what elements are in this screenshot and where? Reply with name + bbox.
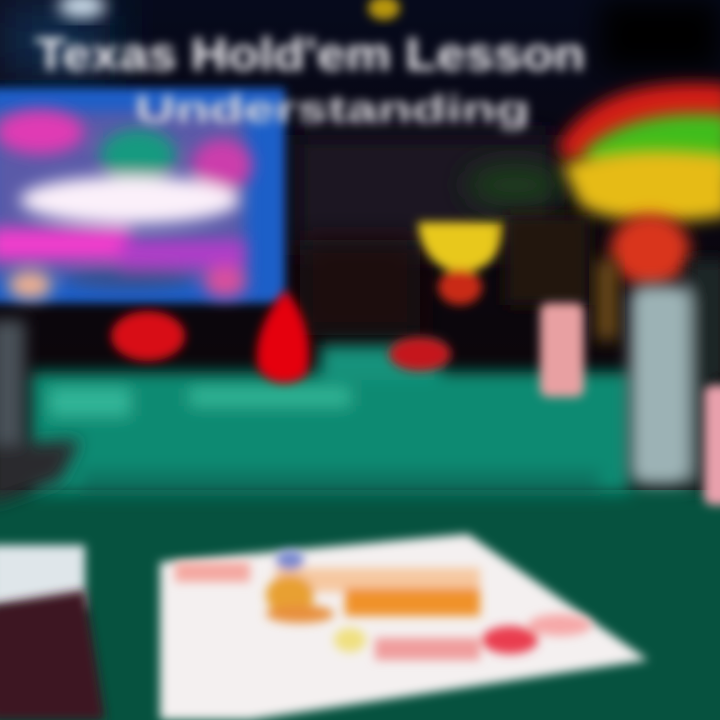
screen blobs	[0, 110, 252, 299]
dark column	[505, 215, 590, 305]
dim green shade	[465, 163, 565, 207]
pink object right	[704, 385, 720, 505]
background wall	[0, 0, 720, 380]
icon: top yellow light	[368, 0, 400, 20]
panel: left screen	[0, 88, 285, 303]
icon: top white light	[58, 0, 106, 18]
left white card	[0, 545, 85, 610]
paper colour blobs	[175, 550, 592, 660]
left maroon block	[0, 590, 105, 720]
small yellow lamp	[418, 222, 505, 305]
brown post	[596, 260, 618, 340]
floor	[0, 490, 720, 720]
icon: red chip right	[389, 337, 451, 371]
heading	[35, 28, 585, 131]
grey figure	[630, 260, 720, 490]
left dark device	[0, 320, 80, 505]
pink pillar	[540, 303, 584, 397]
heading: Texas Hold'em Lesson	[35, 28, 585, 80]
icon: red cone centre	[257, 290, 309, 383]
heading: Understanding	[135, 89, 530, 131]
teal table	[30, 345, 630, 496]
icon: red chip left	[111, 311, 185, 361]
large rainbow lamp	[558, 83, 720, 286]
white paper	[160, 534, 648, 720]
